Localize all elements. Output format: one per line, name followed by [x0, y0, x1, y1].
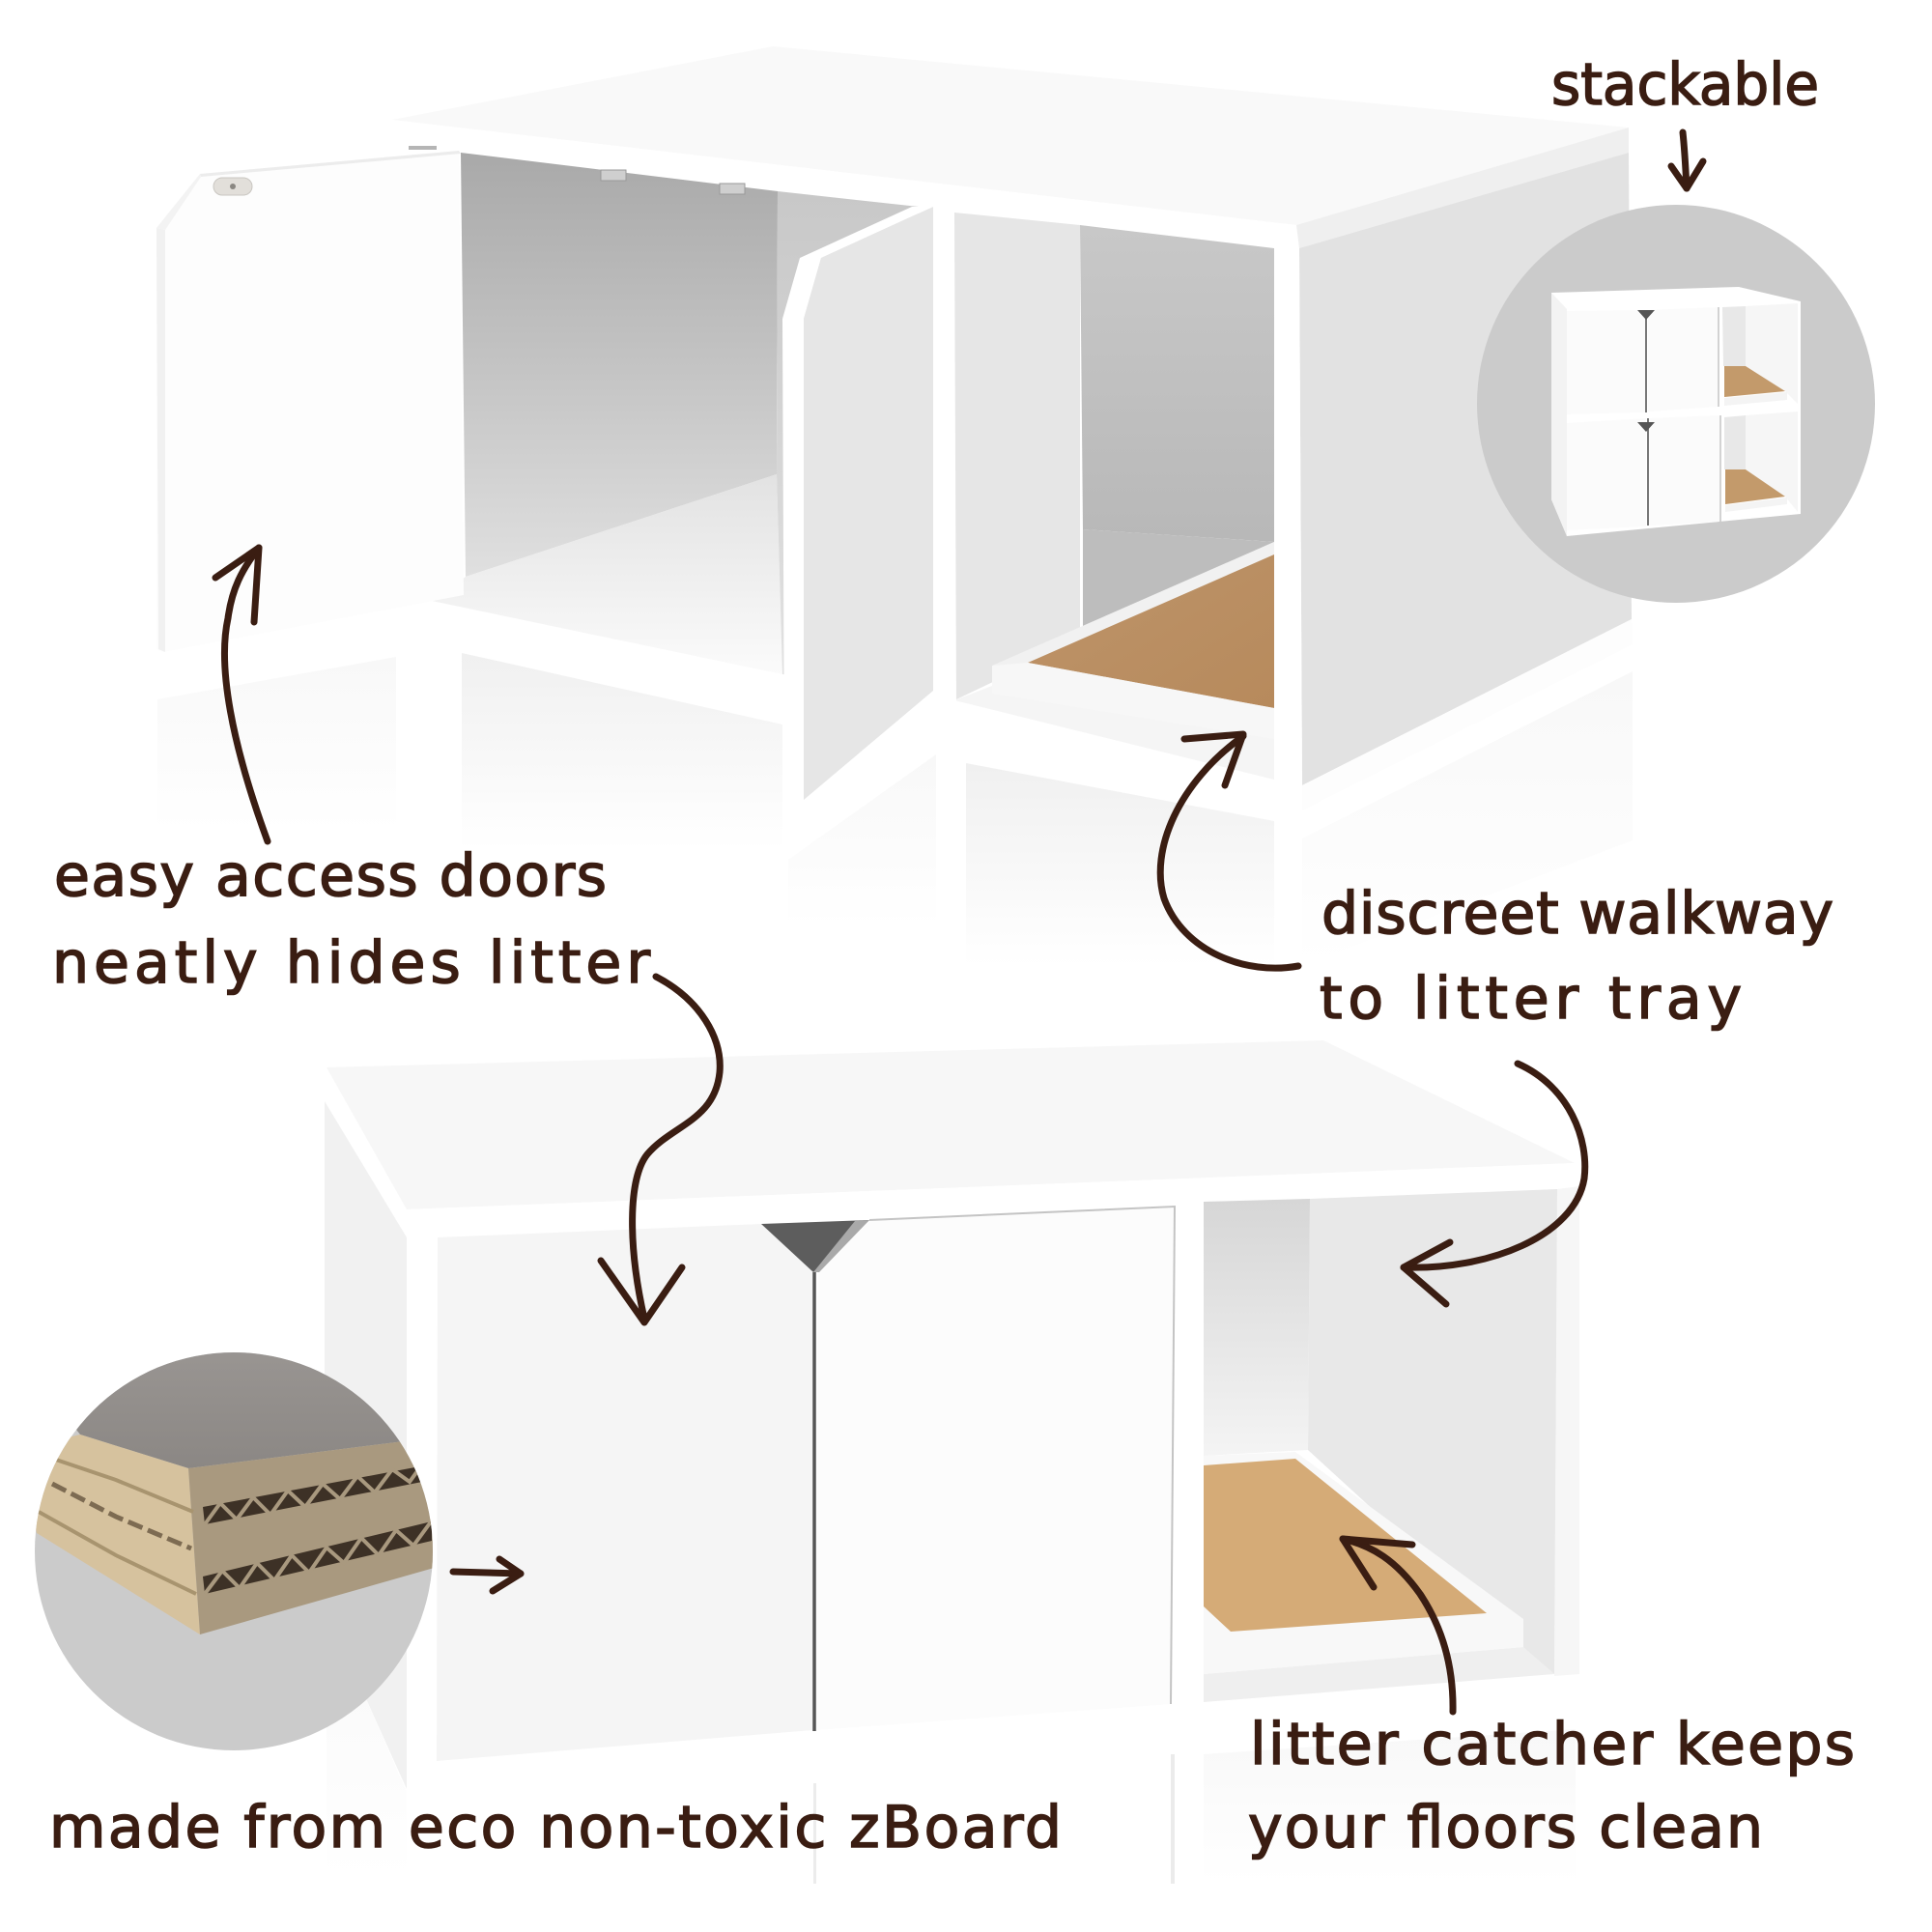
right closed door: [816, 1207, 1175, 1730]
bottom cabinet: closed doors view: [325, 1040, 1579, 1884]
right side panel: [1299, 153, 1632, 785]
central divider: [933, 207, 956, 707]
door pull notch: [761, 1220, 869, 1731]
walkway floor: [954, 686, 1274, 780]
top front edge: [392, 120, 1298, 248]
arrow: to closed door: [601, 977, 720, 1322]
base plate front: [394, 607, 1302, 810]
right compartment floor: [1204, 1647, 1554, 1702]
label: easy access doors: easy access doors: [54, 842, 607, 910]
arrow: to litter catcher: [1343, 1539, 1453, 1712]
arrow: to door: [215, 548, 268, 841]
hinges: [409, 146, 745, 194]
label: discreet walkway: discreet walkway: [1321, 880, 1833, 948]
right compartment left wall: [954, 213, 1080, 700]
left side: [325, 1101, 407, 1789]
left closed door: [437, 1224, 812, 1761]
label: litter catcher keeps: litter catcher keeps: [1250, 1711, 1855, 1778]
corrugated board sample: [36, 1352, 433, 1634]
arrow: to walkway: [1160, 734, 1298, 968]
label: stackable: stackable: [1551, 51, 1819, 119]
right compartment back wall: [1204, 1199, 1310, 1456]
left open door: [156, 151, 464, 652]
litter catcher tray: [1204, 1452, 1523, 1674]
floor reflections: [157, 653, 1633, 966]
arrow: from material: [453, 1559, 521, 1591]
top right edge: [1296, 128, 1629, 248]
middle open door: [782, 207, 933, 800]
right compartment floor: [1083, 529, 1274, 628]
front right post: [1274, 248, 1302, 785]
stackable inset circle: [1477, 205, 1875, 603]
stacked cabinets: [1551, 287, 1801, 536]
label: neatly hides litter: neatly hides litter: [52, 929, 650, 997]
left compartment back wall: [461, 153, 778, 577]
right compartment right wall: [1308, 1189, 1557, 1674]
label: your floors clean: your floors clean: [1248, 1794, 1763, 1861]
arrow: to open compartment: [1404, 1064, 1585, 1304]
label: to litter tray: to litter tray: [1320, 965, 1742, 1033]
arrow: to stack: [1671, 132, 1703, 188]
label: made from eco non-toxic zBoard: made from eco non-toxic zBoard: [49, 1794, 1062, 1861]
top cabinet: open doors view: [156, 46, 1633, 966]
top surface: [327, 1040, 1575, 1209]
bottom reflections: [327, 1608, 1576, 1884]
right frame edge: [1554, 1186, 1579, 1676]
top surface: [392, 46, 1629, 225]
front frame: [407, 1163, 1579, 1789]
left compartment far wall: [777, 191, 933, 691]
left compartment floor: [432, 474, 782, 674]
zBoard material inset circle: [35, 1352, 433, 1750]
base plate right: [1302, 619, 1633, 810]
litter tray: [992, 542, 1274, 739]
right compartment back wall: [1080, 225, 1274, 542]
